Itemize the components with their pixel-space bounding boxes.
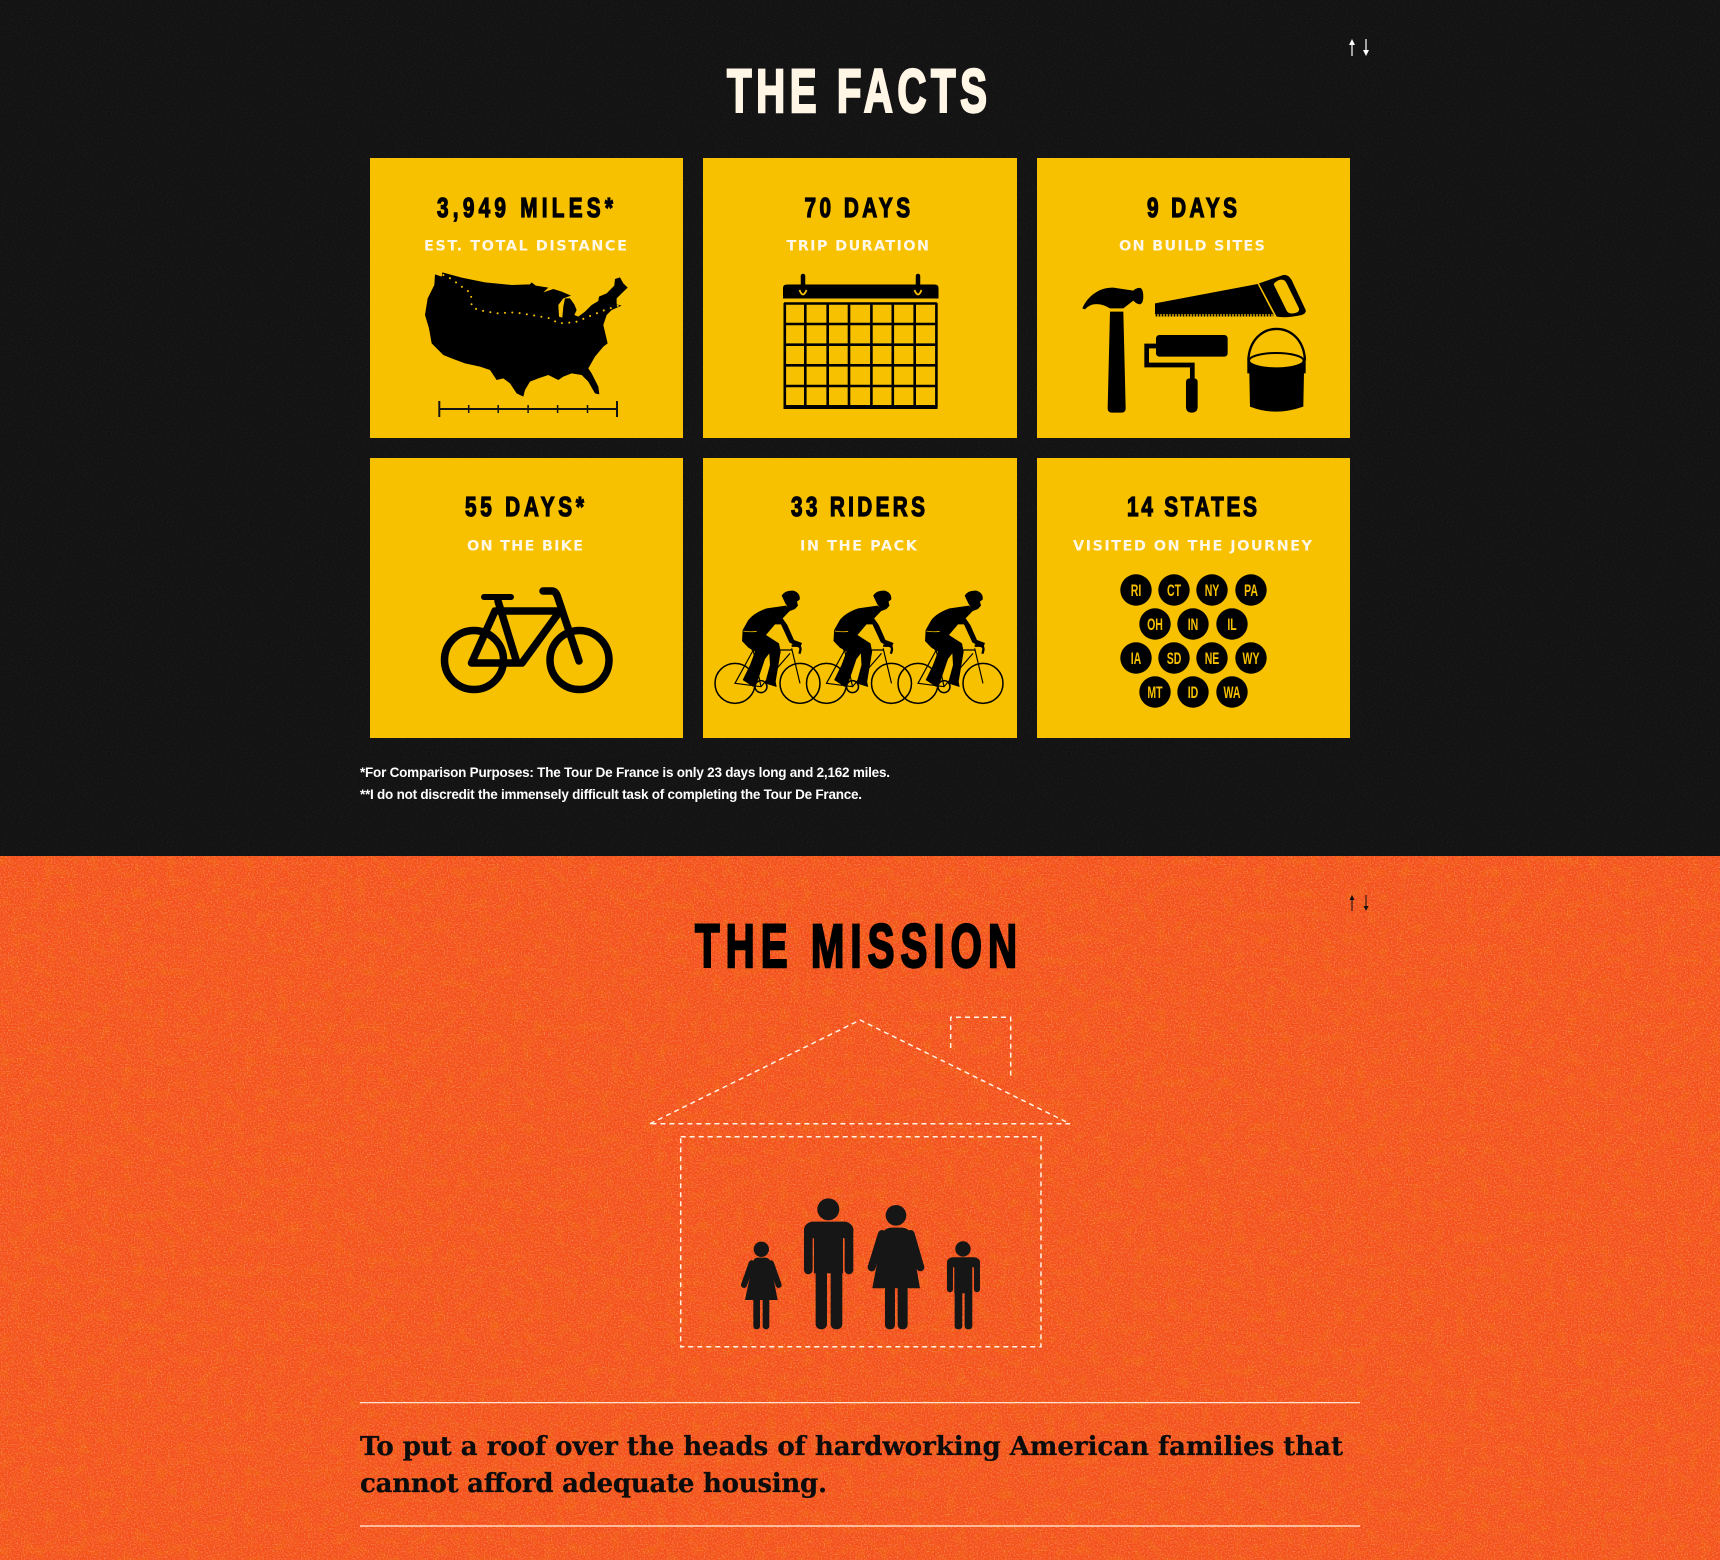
illustration: dashed house outline [650,1017,1070,1347]
icon: girl [744,1242,779,1329]
icon: state badges: SD [1167,648,1181,668]
stat: 9 days: 9 DAYS [1147,193,1237,224]
icon: family of four [744,1198,980,1329]
stat: 3,949 miles: 3,949 MILES* [437,193,613,224]
icon: bicycle [444,591,609,690]
icon: state badges: IN [1188,614,1198,634]
icon: sort arrows [1349,39,1369,56]
label: on the bike: ON THE BIKE [467,538,583,554]
icon: sort arrows [1350,895,1368,911]
icon: three cyclists [715,591,1003,703]
stat: 55 days: 55 DAYS* [465,492,584,523]
label: visited on the journey: VISITED ON THE JOURNEY [1073,538,1312,554]
label: on build sites: ON BUILD SITES [1119,238,1265,254]
icon: state badges: NE [1205,648,1219,668]
icon: state badges: IL [1227,614,1237,634]
icon: state badges: RI [1131,580,1141,600]
icon: state badges: PA [1244,580,1258,600]
panel: riders [703,458,1017,738]
icon: state badges [1120,574,1267,708]
stat: 14 states: 14 STATES [1127,492,1257,523]
panel: distance [370,158,683,438]
section: the mission [0,856,1720,1560]
stat: 33 riders: 33 RIDERS [791,492,925,523]
icon: state badges: NY [1205,580,1220,600]
mission statement: To put a roof over the heads of hardworking American families that [360,1432,1343,1462]
heading: the mission: THE MISSION [695,912,1017,980]
icon: state badges: MT [1147,682,1163,702]
icon: state badges: ID [1188,682,1198,702]
mission statement: cannot afford adequate housing. [360,1469,827,1499]
icon: man [804,1198,853,1329]
icon: calendar [783,276,938,409]
icon: distance scale bar [439,401,617,417]
icon: state badges: WA [1224,682,1240,702]
icon: construction tools [1082,275,1306,413]
footnotes: *For Comparison Purposes: The Tour De France is only 23 days long and 2,162 miles. [360,765,890,780]
panel: build sites [1037,158,1350,438]
footnotes [360,765,890,802]
icon: state badges: OH [1147,614,1163,634]
label: trip duration: TRIP DURATION [786,238,929,254]
label: est. total distance: EST. TOTAL DISTANCE [424,238,627,254]
mission statement [360,1403,1360,1526]
stat: 70 days: 70 DAYS [804,193,910,224]
heading: the facts: THE FACTS [727,57,987,125]
icon: state badges: CT [1167,580,1181,600]
panel: states [1037,458,1350,738]
icon: map of the united states with route [425,272,628,397]
panel: trip duration [703,158,1017,438]
icon: boy [947,1241,980,1329]
footnotes: **I do not discredit the immensely difficult task of completing the Tour De France. [360,787,862,802]
label: in the pack: IN THE PACK [800,538,918,554]
icon: state badges: IA [1131,648,1141,668]
panel: on the bike [370,458,683,738]
section: the facts [0,0,1720,856]
icon: state badges: WY [1243,648,1260,668]
icon: woman [872,1205,920,1329]
